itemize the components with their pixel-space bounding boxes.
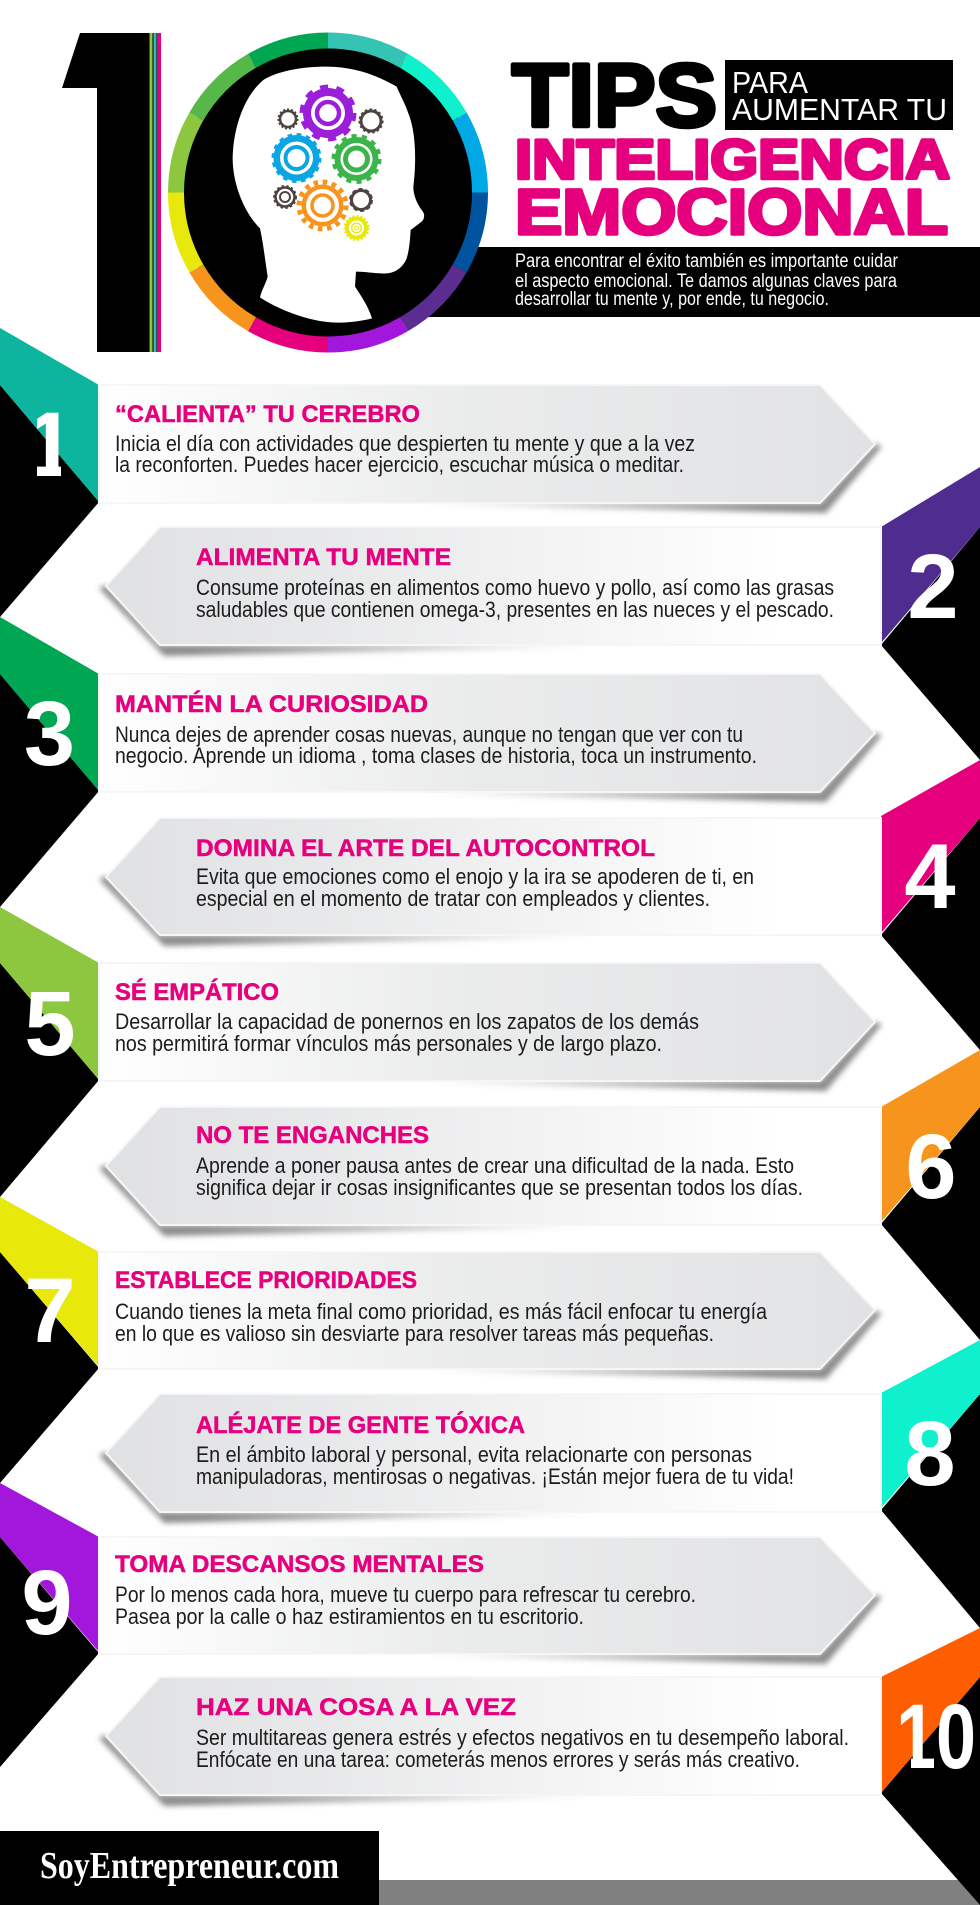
- brown gear lower right: [350, 189, 372, 211]
- body 10: Ser multitareas genera estrés y efectos negativos en tu desempeño laboral.: [196, 1725, 849, 1750]
- body 3: Nunca dejes de aprender cosas nuevas, aunque no tengan que ver con tu: [115, 722, 743, 747]
- colour tab 8: [881, 1340, 980, 1508]
- tip 10: [99, 1628, 980, 1806]
- tip 9: [0, 1483, 882, 1664]
- number 4: 4: [904, 826, 956, 928]
- tip 3: [0, 617, 882, 802]
- word TIPS: TIPS: [512, 45, 717, 145]
- body 1: Inicia el día con actividades que despierten tu mente y que a la vez: [115, 431, 695, 456]
- tip 5: [0, 907, 882, 1091]
- number 2: 2: [907, 536, 959, 638]
- body 3: [115, 722, 757, 768]
- body 9: Por lo menos cada hora, mueve tu cuerpo para refrescar tu cerebro.: [115, 1582, 696, 1607]
- brown gear lower left: [274, 186, 296, 208]
- black subtitle box: PARA: [732, 65, 808, 100]
- colour tab 10: [881, 1628, 980, 1793]
- body 6: Aprende a poner pausa antes de crear una dificultad de la nada. Esto: [196, 1153, 794, 1178]
- heading 8: ALÉJATE DE GENTE TÓXICA: [196, 1411, 525, 1439]
- number 6: 6: [905, 1116, 957, 1218]
- body 7: en lo que es valioso sin desviarte para resolver tareas más pequeñas.: [115, 1321, 714, 1346]
- tip 1: [0, 328, 882, 513]
- arrow panel 4: [99, 818, 881, 946]
- arrow panel 3: [99, 674, 882, 802]
- colour tab 5: [0, 907, 99, 1080]
- intro band: desarrollar tu mente y, por ende, tu negocio.: [515, 289, 829, 310]
- big numeral one: [62, 33, 161, 352]
- arrow panel 6: [99, 1107, 881, 1236]
- tip 2: [99, 467, 980, 656]
- body 5: Desarrollar la capacidad de ponernos en los zapatos de los demás: [115, 1009, 699, 1034]
- word INTELIGENCIA: INTELIGENCIA: [515, 128, 950, 190]
- colour tab 3: [0, 617, 99, 791]
- heading 5: SÉ EMPÁTICO: [115, 978, 279, 1006]
- colour tab 9: [0, 1483, 99, 1652]
- colour tab 4: [881, 760, 980, 933]
- intro band: Para encontrar el éxito también es importante cuidar: [515, 251, 899, 272]
- body 9: Pasea por la calle o haz estiramientos en tu escritorio.: [115, 1604, 584, 1629]
- purple gear: [302, 87, 354, 139]
- heading 6: NO TE ENGANCHES: [196, 1122, 429, 1149]
- arrow panel 9: [99, 1537, 882, 1664]
- body 4: Evita que emociones como el enojo y la ira se apoderen de ti, en: [196, 864, 754, 889]
- body 5: [115, 1009, 699, 1056]
- title: [512, 45, 953, 248]
- heading 1: “CALIENTA” TU CEREBRO: [115, 401, 420, 428]
- body 3: negocio. Aprende un idioma , toma clases de historia, toca un instrumento.: [115, 743, 757, 768]
- side chevrons: [0, 385, 980, 1905]
- green gear: [334, 136, 379, 182]
- body 8: [196, 1442, 794, 1489]
- heading 2: ALIMENTA TU MENTE: [196, 544, 451, 571]
- body 10: Enfócate en una tarea: cometerás menos errores y serás más creativo.: [196, 1747, 800, 1772]
- arrow panel 2: [99, 527, 881, 656]
- body 9: [115, 1582, 696, 1629]
- number 3: 3: [24, 683, 75, 785]
- tip 7: [0, 1197, 882, 1379]
- blue gear: [273, 134, 320, 182]
- body 2: saludables que contienen omega-3, presentes en las nueces y el pescado.: [196, 597, 834, 622]
- heading 10: HAZ UNA COSA A LA VEZ: [196, 1694, 516, 1721]
- body 2: [196, 575, 834, 622]
- arrow panel 7: [99, 1252, 882, 1379]
- body 6: significa dejar ir cosas insignificantes que se presentan todos los días.: [196, 1175, 803, 1200]
- orange gear: [299, 182, 346, 229]
- number 1: 1: [24, 394, 76, 496]
- number 9: 9: [21, 1552, 73, 1654]
- black subtitle box: [725, 60, 953, 130]
- body 8: En el ámbito laboral y personal, evita relacionarte con personas: [196, 1442, 752, 1467]
- number 7: 7: [24, 1260, 76, 1362]
- circle with head: [176, 40, 480, 344]
- colour tab 7: [0, 1197, 99, 1367]
- colour tab 6: [881, 1050, 980, 1222]
- arrow panel 8: [99, 1394, 881, 1523]
- body 7: Cuando tienes la meta final como prioridad, es más fácil enfocar tu energía: [115, 1299, 768, 1324]
- heading 3: MANTÉN LA CURIOSIDAD: [115, 690, 428, 718]
- body 1: [115, 431, 695, 477]
- footer logo: SoyEntrepreneur.com: [40, 1845, 339, 1887]
- heading 7: ESTABLECE PRIORIDADES: [115, 1267, 417, 1294]
- footer grey bar: [379, 1880, 980, 1905]
- body 1: la reconforten. Puedes hacer ejercicio, escuchar música o meditar.: [115, 452, 684, 477]
- header: [62, 33, 980, 352]
- intro band: [400, 247, 980, 317]
- tip 8: [99, 1340, 980, 1523]
- colour ring: [176, 40, 480, 344]
- word EMOCIONAL: EMOCIONAL: [515, 176, 948, 248]
- body 10: [196, 1725, 849, 1772]
- tip 4: [99, 760, 980, 946]
- small brown gear: [278, 109, 298, 129]
- brown gear right: [359, 109, 383, 133]
- number 8: 8: [904, 1403, 956, 1505]
- arrow panel 10: [99, 1677, 881, 1806]
- gears: [273, 87, 383, 240]
- yellow gear: [344, 216, 368, 240]
- body 4: especial en el momento de tratar con empleados y clientes.: [196, 886, 710, 911]
- tip 6: [99, 1050, 980, 1236]
- body 2: Consume proteínas en alimentos como huevo y pollo, así como las grasas: [196, 575, 834, 600]
- intro band: el aspecto emocional. Te damos algunas claves para: [515, 271, 897, 292]
- body 4: [196, 864, 754, 911]
- number 5: 5: [24, 973, 76, 1075]
- black subtitle box: AUMENTAR TU: [732, 92, 947, 127]
- body 8: manipuladoras, mentirosas o negativas. ¡Están mejor fuera de tu vida!: [196, 1464, 794, 1489]
- body 5: nos permitirá formar vínculos más personales y de largo plazo.: [115, 1031, 662, 1056]
- colour tab 1: [0, 328, 99, 502]
- colour tab 2: [881, 467, 980, 643]
- head silhouette: [233, 67, 424, 323]
- body 6: [196, 1153, 803, 1200]
- heading 4: DOMINA EL ARTE DEL AUTOCONTROL: [196, 835, 655, 862]
- footer logo: [0, 1831, 379, 1905]
- heading 9: TOMA DESCANSOS MENTALES: [115, 1551, 484, 1578]
- arrow panel 5: [99, 963, 882, 1091]
- body 7: [115, 1299, 768, 1346]
- arrow panel 1: [99, 385, 882, 513]
